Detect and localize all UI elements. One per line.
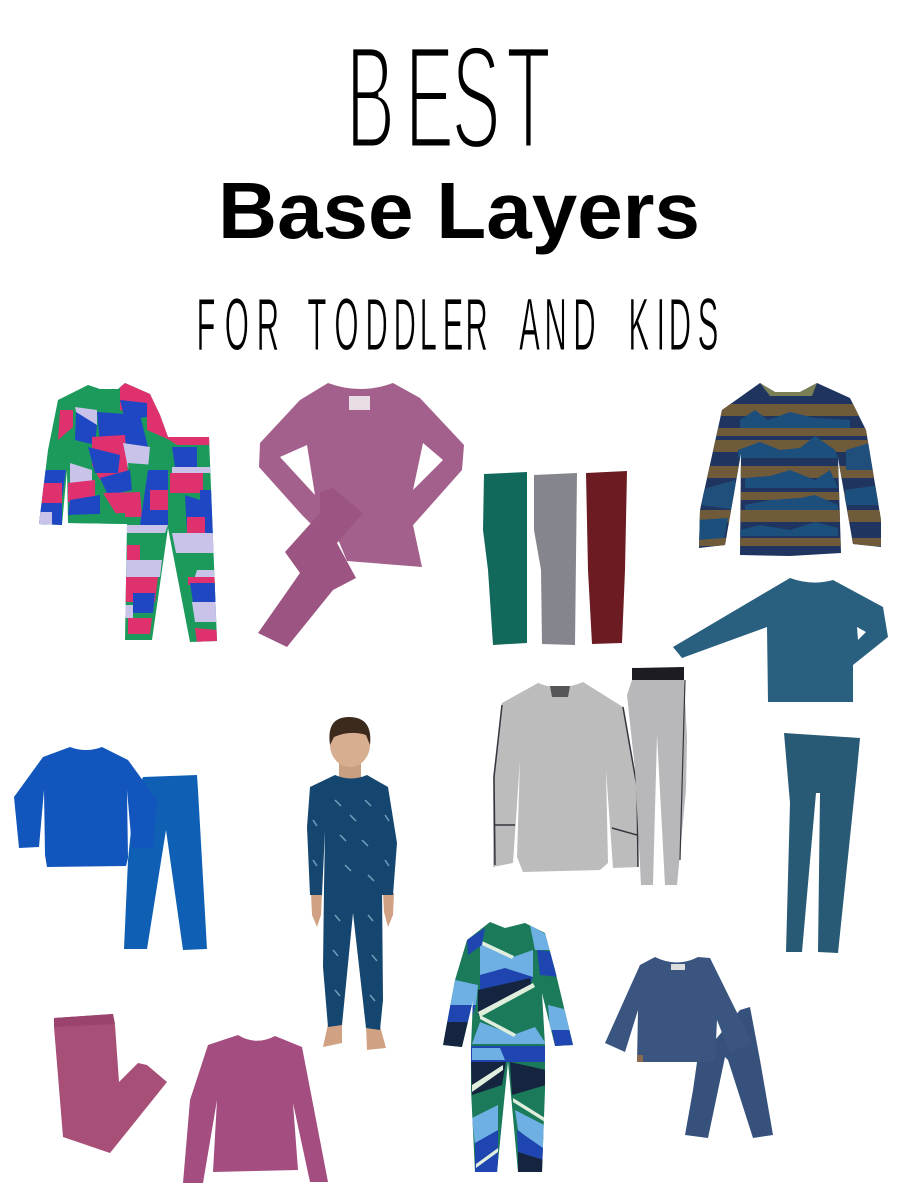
feet <box>323 1024 386 1050</box>
product: teal rib leggings <box>784 733 860 953</box>
slate pants <box>685 1007 773 1138</box>
heading: Base Layers: Base Layers <box>218 166 700 255</box>
slate sweatshirt <box>605 957 752 1062</box>
product: gray leggings with waistband <box>627 667 687 885</box>
product: teal rib top <box>673 578 888 702</box>
neck tag <box>671 964 685 970</box>
title: BEST: BEST <box>346 15 551 180</box>
outfit <box>307 775 397 1030</box>
product: mountain print set <box>440 920 580 1175</box>
green leggings <box>483 472 527 645</box>
product: gray base layer top <box>493 682 638 872</box>
product: rose long sleeve top <box>183 1035 328 1183</box>
armpit gap right <box>413 443 443 490</box>
head <box>330 723 370 767</box>
leather patch <box>637 1055 643 1062</box>
mauve pants <box>258 488 363 647</box>
product: three leggings <box>483 471 627 645</box>
product: blue sweatshirt <box>14 747 157 867</box>
product: mauve pajama set <box>258 383 464 647</box>
mauve long sleeve top <box>259 383 464 567</box>
product: boy in navy set <box>300 717 400 1050</box>
hands <box>311 893 394 927</box>
gray leggings <box>534 473 577 645</box>
hair <box>329 717 370 745</box>
product: multicolor print set <box>35 380 225 645</box>
product: navy mountain print top <box>695 380 885 560</box>
product: slate blue sweatshirt set <box>605 957 773 1138</box>
neck <box>339 760 361 780</box>
label tag <box>349 396 370 410</box>
subtitle: for toddler and kids: FOR TODDLER AND KIDS <box>197 285 718 367</box>
armpit gap left <box>280 445 315 495</box>
product: blue pants <box>124 775 207 950</box>
product: rose pants <box>54 1014 167 1153</box>
maroon leggings <box>586 471 627 644</box>
